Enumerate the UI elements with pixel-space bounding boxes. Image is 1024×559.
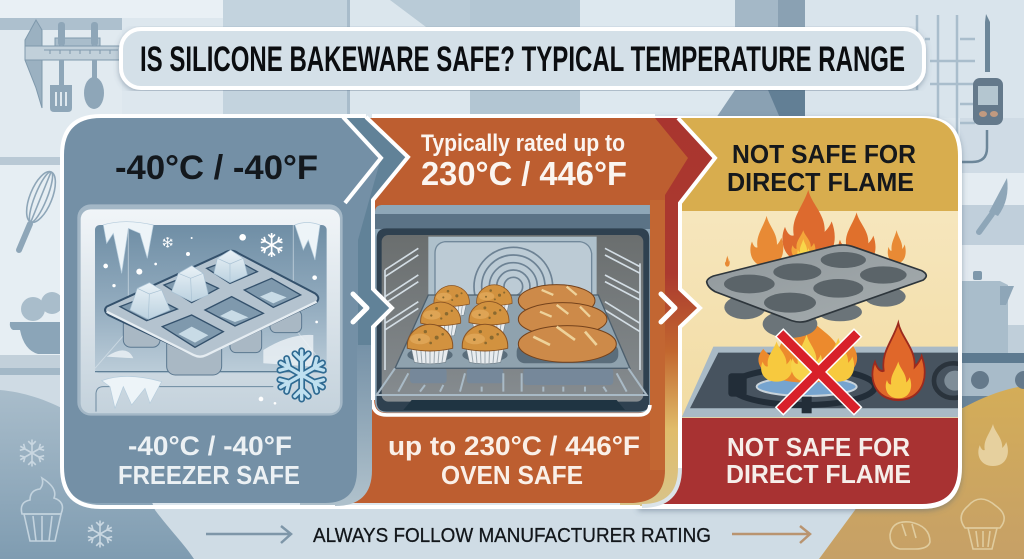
oven frame [372,205,650,415]
arrow: left [206,526,291,543]
panel 1 body [63,117,408,506]
ice cubes [130,250,247,319]
icon: large snowflake [277,351,326,399]
icon: spoon [84,22,104,109]
icon: snowflake small [86,520,114,548]
panel: direct flame [620,118,973,507]
illustration: muffin tin over flame [682,190,973,417]
panel: oven safe [325,116,688,507]
icon: thermometer [960,14,1003,162]
ice tray [105,251,318,375]
panel: freezer safe [62,116,408,507]
text: top heading: Typically rated up to [421,130,625,157]
oven racks [385,248,640,370]
icon: coffee pot [960,271,1014,353]
text: bottom caption: -40°C / -40°F [128,431,292,461]
panel 2 border [325,116,655,507]
text: top heading [421,130,627,192]
text: top heading: -40°C / -40°F [115,149,318,187]
flame under tin [758,314,857,383]
text: bottom caption: FREEZER SAFE [118,460,300,490]
text: bottom caption [388,431,640,490]
footer note with arrows [206,525,810,547]
illustration: frosted ice tray [77,204,343,416]
icon: whisk [19,168,61,250]
icon: small flame [872,323,925,400]
icon: knife [979,178,1008,232]
icon: calipers [25,20,120,108]
illustration: oven with muffins and bread [372,205,650,415]
small snowflakes [162,233,284,257]
background blob: lower right [819,386,1024,559]
arrow strip between oven and flame panels [620,118,715,506]
text: bottom caption: OVEN SAFE [441,460,583,490]
footer text: ALWAYS FOLLOW MANUFACTURER RATING [313,525,711,547]
icon: muffin outline [961,499,1004,549]
icicles [102,222,320,408]
icon: snowflake on blob [18,440,46,466]
icon: stove knobs [971,371,1024,389]
background blob: lower left [0,390,194,559]
arrow band tint [343,117,408,345]
falling snow [103,234,318,405]
panel 1 border [62,116,408,507]
text: top heading: DIRECT FLAME [727,167,914,197]
panel 2 body [345,118,688,503]
arrow: right [732,526,810,543]
text: bottom caption: DIRECT FLAME [726,459,911,489]
icon: flame outline [978,424,1008,466]
muffin tin [707,245,926,338]
icon: spatula [50,22,72,112]
panel 3 body [640,118,960,507]
icon: red X [783,337,854,407]
oven back wall and fan [428,237,597,337]
flames behind tin [725,190,906,267]
icon: chevron to flame panel [661,294,675,322]
baking tray [395,295,630,385]
freezer frame [77,204,343,416]
text: bottom caption [726,432,911,489]
icon: wall grid [917,15,975,165]
icon: chevron to oven panel [353,294,367,322]
title banner [121,29,924,88]
text: top heading [727,139,916,197]
text: bottom caption [118,431,300,490]
text: bottom caption: NOT SAFE FOR [727,432,910,462]
text: top heading: NOT SAFE FOR [732,139,916,169]
stove [682,347,973,417]
icon: bread outline [890,522,930,549]
bread loaves [518,285,616,362]
icon: pot with dough [10,292,63,354]
icon: cupcake [21,478,62,541]
muffins [407,285,512,365]
text: top heading: 230°C / 446°F [421,155,627,192]
front rack [377,368,647,410]
text: bottom caption: up to 230°C / 446°F [388,431,640,461]
